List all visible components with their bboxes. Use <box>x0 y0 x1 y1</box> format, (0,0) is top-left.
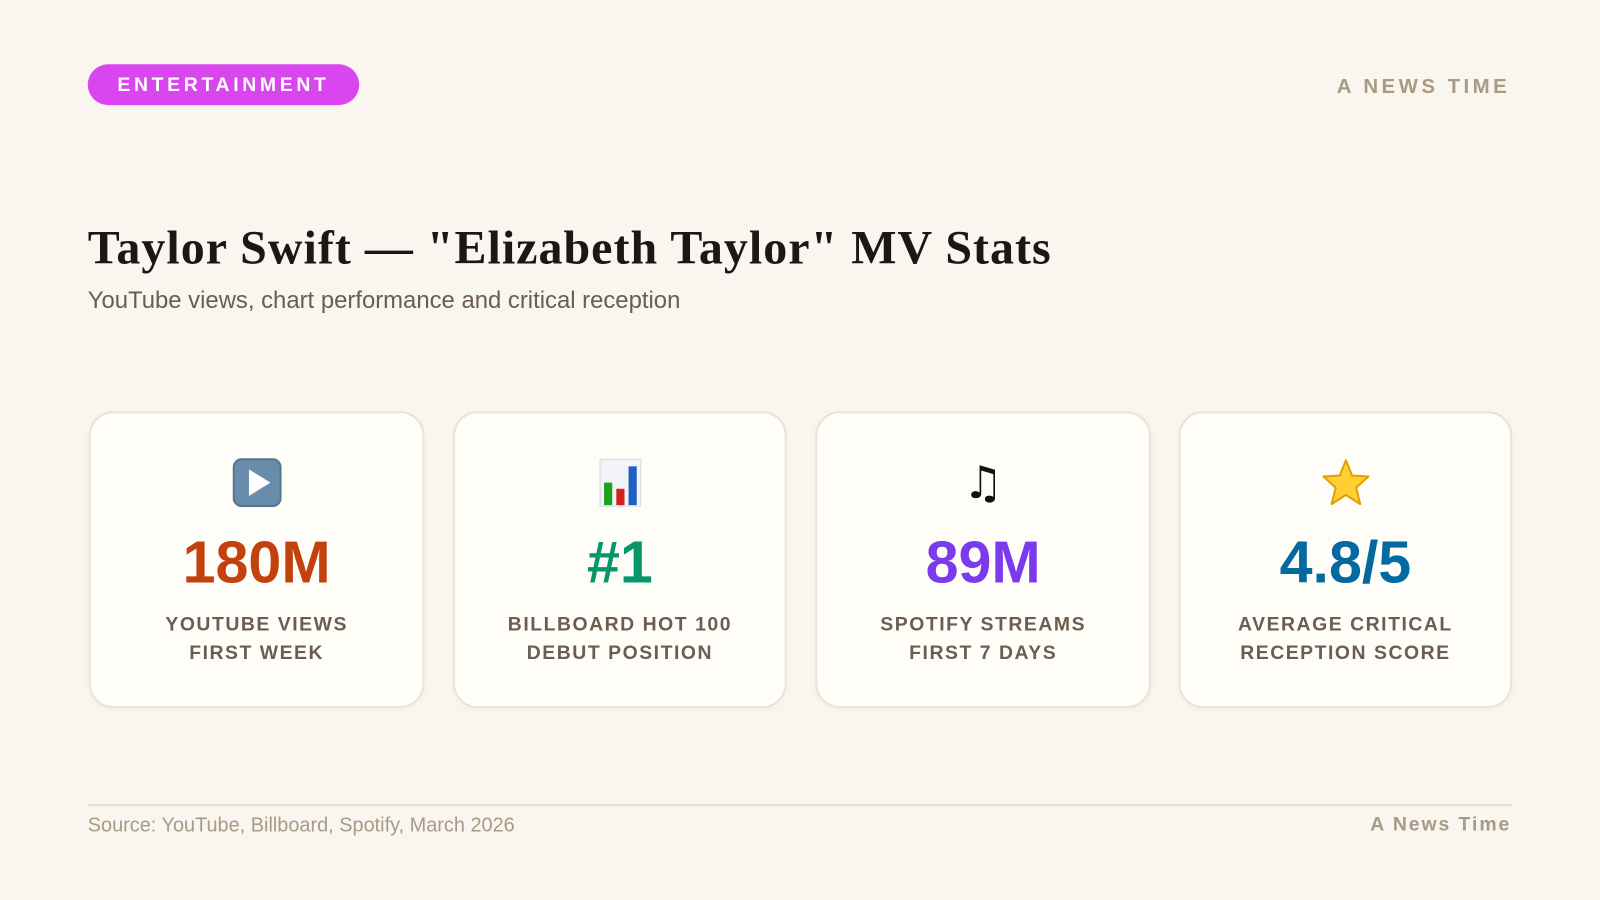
label <box>1238 614 1453 664</box>
subtitle: YouTube views, chart performance and critical reception <box>88 287 680 313</box>
label <box>165 614 348 664</box>
icon: play button <box>232 458 282 508</box>
card: billboard <box>453 411 787 708</box>
number: 180M <box>183 530 331 596</box>
category pill <box>88 64 359 105</box>
icon: star <box>1322 459 1370 506</box>
card: spotify <box>815 411 1151 708</box>
label: DEBUT POSITION <box>527 643 713 664</box>
label: BILLBOARD HOT 100 <box>508 614 732 636</box>
label <box>880 614 1086 664</box>
label: SPOTIFY STREAMS <box>880 614 1086 636</box>
label <box>508 614 732 664</box>
label: FIRST 7 DAYS <box>909 643 1057 664</box>
category pill: ENTERTAINMENT <box>117 74 330 96</box>
label: AVERAGE CRITICAL <box>1238 614 1453 636</box>
source: Source: YouTube, Billboard, Spotify, March 2026 <box>88 814 515 837</box>
brand top right: A NEWS TIME <box>1337 76 1510 98</box>
number: #1 <box>587 530 653 596</box>
card: youtube views <box>89 411 424 708</box>
title: Taylor Swift — "Elizabeth Taylor" MV Stats <box>88 221 1052 274</box>
label: YOUTUBE VIEWS <box>165 614 348 636</box>
icon: bar chart <box>600 458 642 507</box>
card: critical score <box>1179 411 1512 708</box>
number: 4.8/5 <box>1280 530 1411 596</box>
icon: music note: ♫ <box>963 457 1003 509</box>
number: 89M <box>926 530 1041 596</box>
footer brand: A News Time <box>1370 814 1511 836</box>
label: RECEPTION SCORE <box>1240 643 1451 664</box>
label: FIRST WEEK <box>189 643 324 664</box>
